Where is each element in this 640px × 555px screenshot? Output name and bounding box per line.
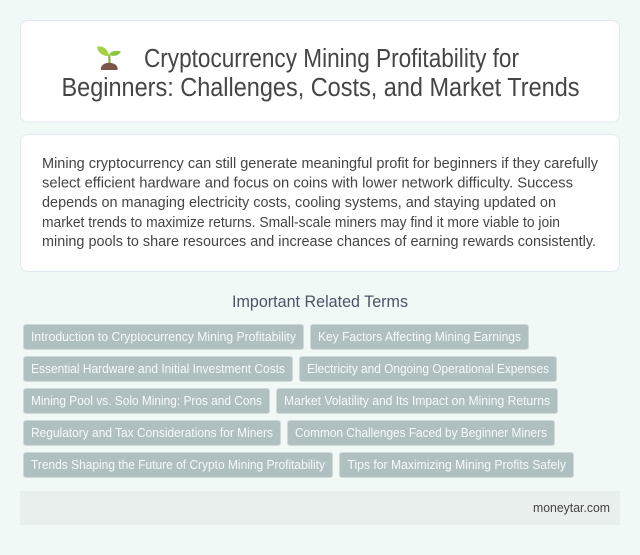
icon: seedling	[97, 47, 121, 70]
tag list: Tips for Maximizing Mining Profits Safely	[348, 458, 567, 472]
tag list: Common Challenges Faced by Beginner Miners	[295, 426, 547, 440]
tag list: Key Factors Affecting Mining Earnings	[318, 330, 521, 344]
panel: summary paragraph: market trends to maximize returns. Small-scale miners may find it more viable to join	[42, 215, 560, 231]
panel: summary paragraph: depends on managing electricity costs, cooling systems, and staying updated on	[42, 195, 556, 211]
tag list: Trends Shaping the Future of Crypto Mining Profitability	[31, 458, 326, 472]
tag list: Introduction to Cryptocurrency Mining Profitability	[31, 330, 297, 344]
title	[62, 45, 580, 102]
footer	[20, 491, 620, 525]
footer: moneytar.com	[533, 501, 610, 515]
tag list: Regulatory and Tax Considerations for Miners	[31, 426, 273, 440]
title: Beginners: Challenges, Costs, and Market Trends	[62, 74, 580, 102]
panel: summary paragraph	[20, 134, 620, 272]
header panel	[20, 20, 620, 122]
tag list: Market Volatility and Its Impact on Mining Returns	[284, 394, 550, 408]
panel: summary paragraph: Mining cryptocurrency can still generate meaningful profit for beginners if they carefully	[42, 156, 599, 172]
tag list: Electricity and Ongoing Operational Expenses	[307, 362, 549, 376]
panel: summary paragraph: mining pools to share resources and increase chances of earning rewards consistently.	[42, 234, 596, 250]
tag list	[24, 324, 574, 478]
panel: summary paragraph: select efficient hardware and focus on coins with lower network difficulty. Success	[42, 176, 573, 192]
tag list: Essential Hardware and Initial Investment Costs	[31, 362, 285, 376]
title: Cryptocurrency Mining Profitability for	[144, 45, 519, 73]
heading: important related terms: Important Related Terms	[232, 293, 408, 311]
tag list: Mining Pool vs. Solo Mining: Pros and Cons	[31, 394, 262, 408]
